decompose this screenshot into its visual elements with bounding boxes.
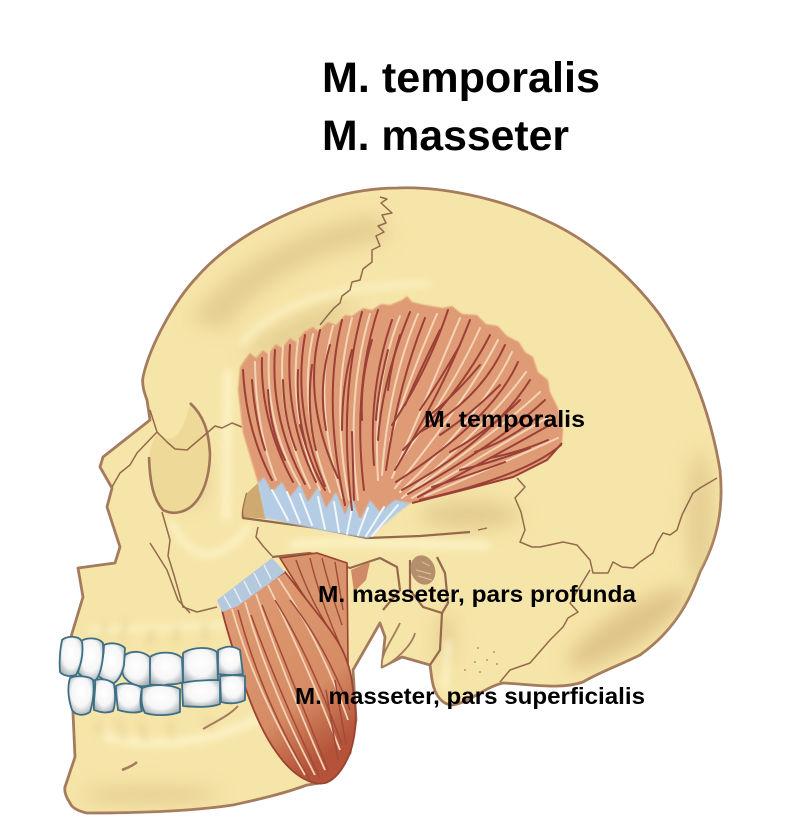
title: M. temporalis bbox=[322, 54, 600, 102]
temporalis lower edge bbox=[412, 443, 562, 503]
teeth bbox=[60, 637, 245, 715]
muscle: masseter, deep part bbox=[280, 553, 370, 662]
dark fibres bbox=[243, 310, 561, 510]
ear canal bbox=[407, 552, 439, 588]
temporalis tendon bbox=[258, 477, 410, 538]
dark strands bbox=[238, 600, 350, 780]
mental foramen bbox=[122, 762, 137, 770]
alveolar ridges bbox=[96, 620, 212, 742]
label: M. masseter, pars superficialis: M. masseter, pars superficialis bbox=[295, 683, 645, 709]
label: M. masseter, pars profunda: M. masseter, pars profunda bbox=[318, 581, 636, 607]
light strands bbox=[232, 578, 348, 775]
superficial belly bbox=[222, 572, 356, 784]
orbit rim bbox=[149, 403, 210, 513]
title: M. masseter bbox=[322, 112, 569, 160]
zygomatic arch and temporal bone bbox=[243, 493, 487, 665]
superficial tendon bbox=[217, 558, 285, 612]
muscle: masseter, superficial part bbox=[217, 558, 356, 784]
tendon strands bbox=[224, 565, 271, 608]
deep belly bbox=[280, 553, 348, 662]
upper teeth bbox=[60, 637, 243, 686]
temporalis belly bbox=[238, 296, 563, 520]
light fibres bbox=[255, 314, 558, 500]
label: M. temporalis: M. temporalis bbox=[424, 406, 585, 432]
muscle: temporalis bbox=[238, 296, 563, 538]
bone pores bbox=[464, 647, 498, 673]
orbit bbox=[148, 403, 209, 512]
temporal fossa bbox=[243, 483, 266, 519]
sutures bbox=[112, 197, 717, 682]
bone shading bbox=[80, 215, 714, 803]
skull illustration bbox=[65, 188, 721, 813]
oblique ridge bbox=[203, 706, 238, 729]
tendon highlights bbox=[272, 490, 398, 536]
deep fibres bbox=[296, 558, 343, 645]
infographic: skull with masticatory muscles bbox=[58, 61, 722, 814]
skull silhouette bbox=[65, 188, 721, 813]
styloid process bbox=[382, 623, 415, 667]
small deep bundle bbox=[351, 562, 370, 592]
lower teeth bbox=[68, 675, 245, 715]
title bbox=[322, 54, 600, 160]
